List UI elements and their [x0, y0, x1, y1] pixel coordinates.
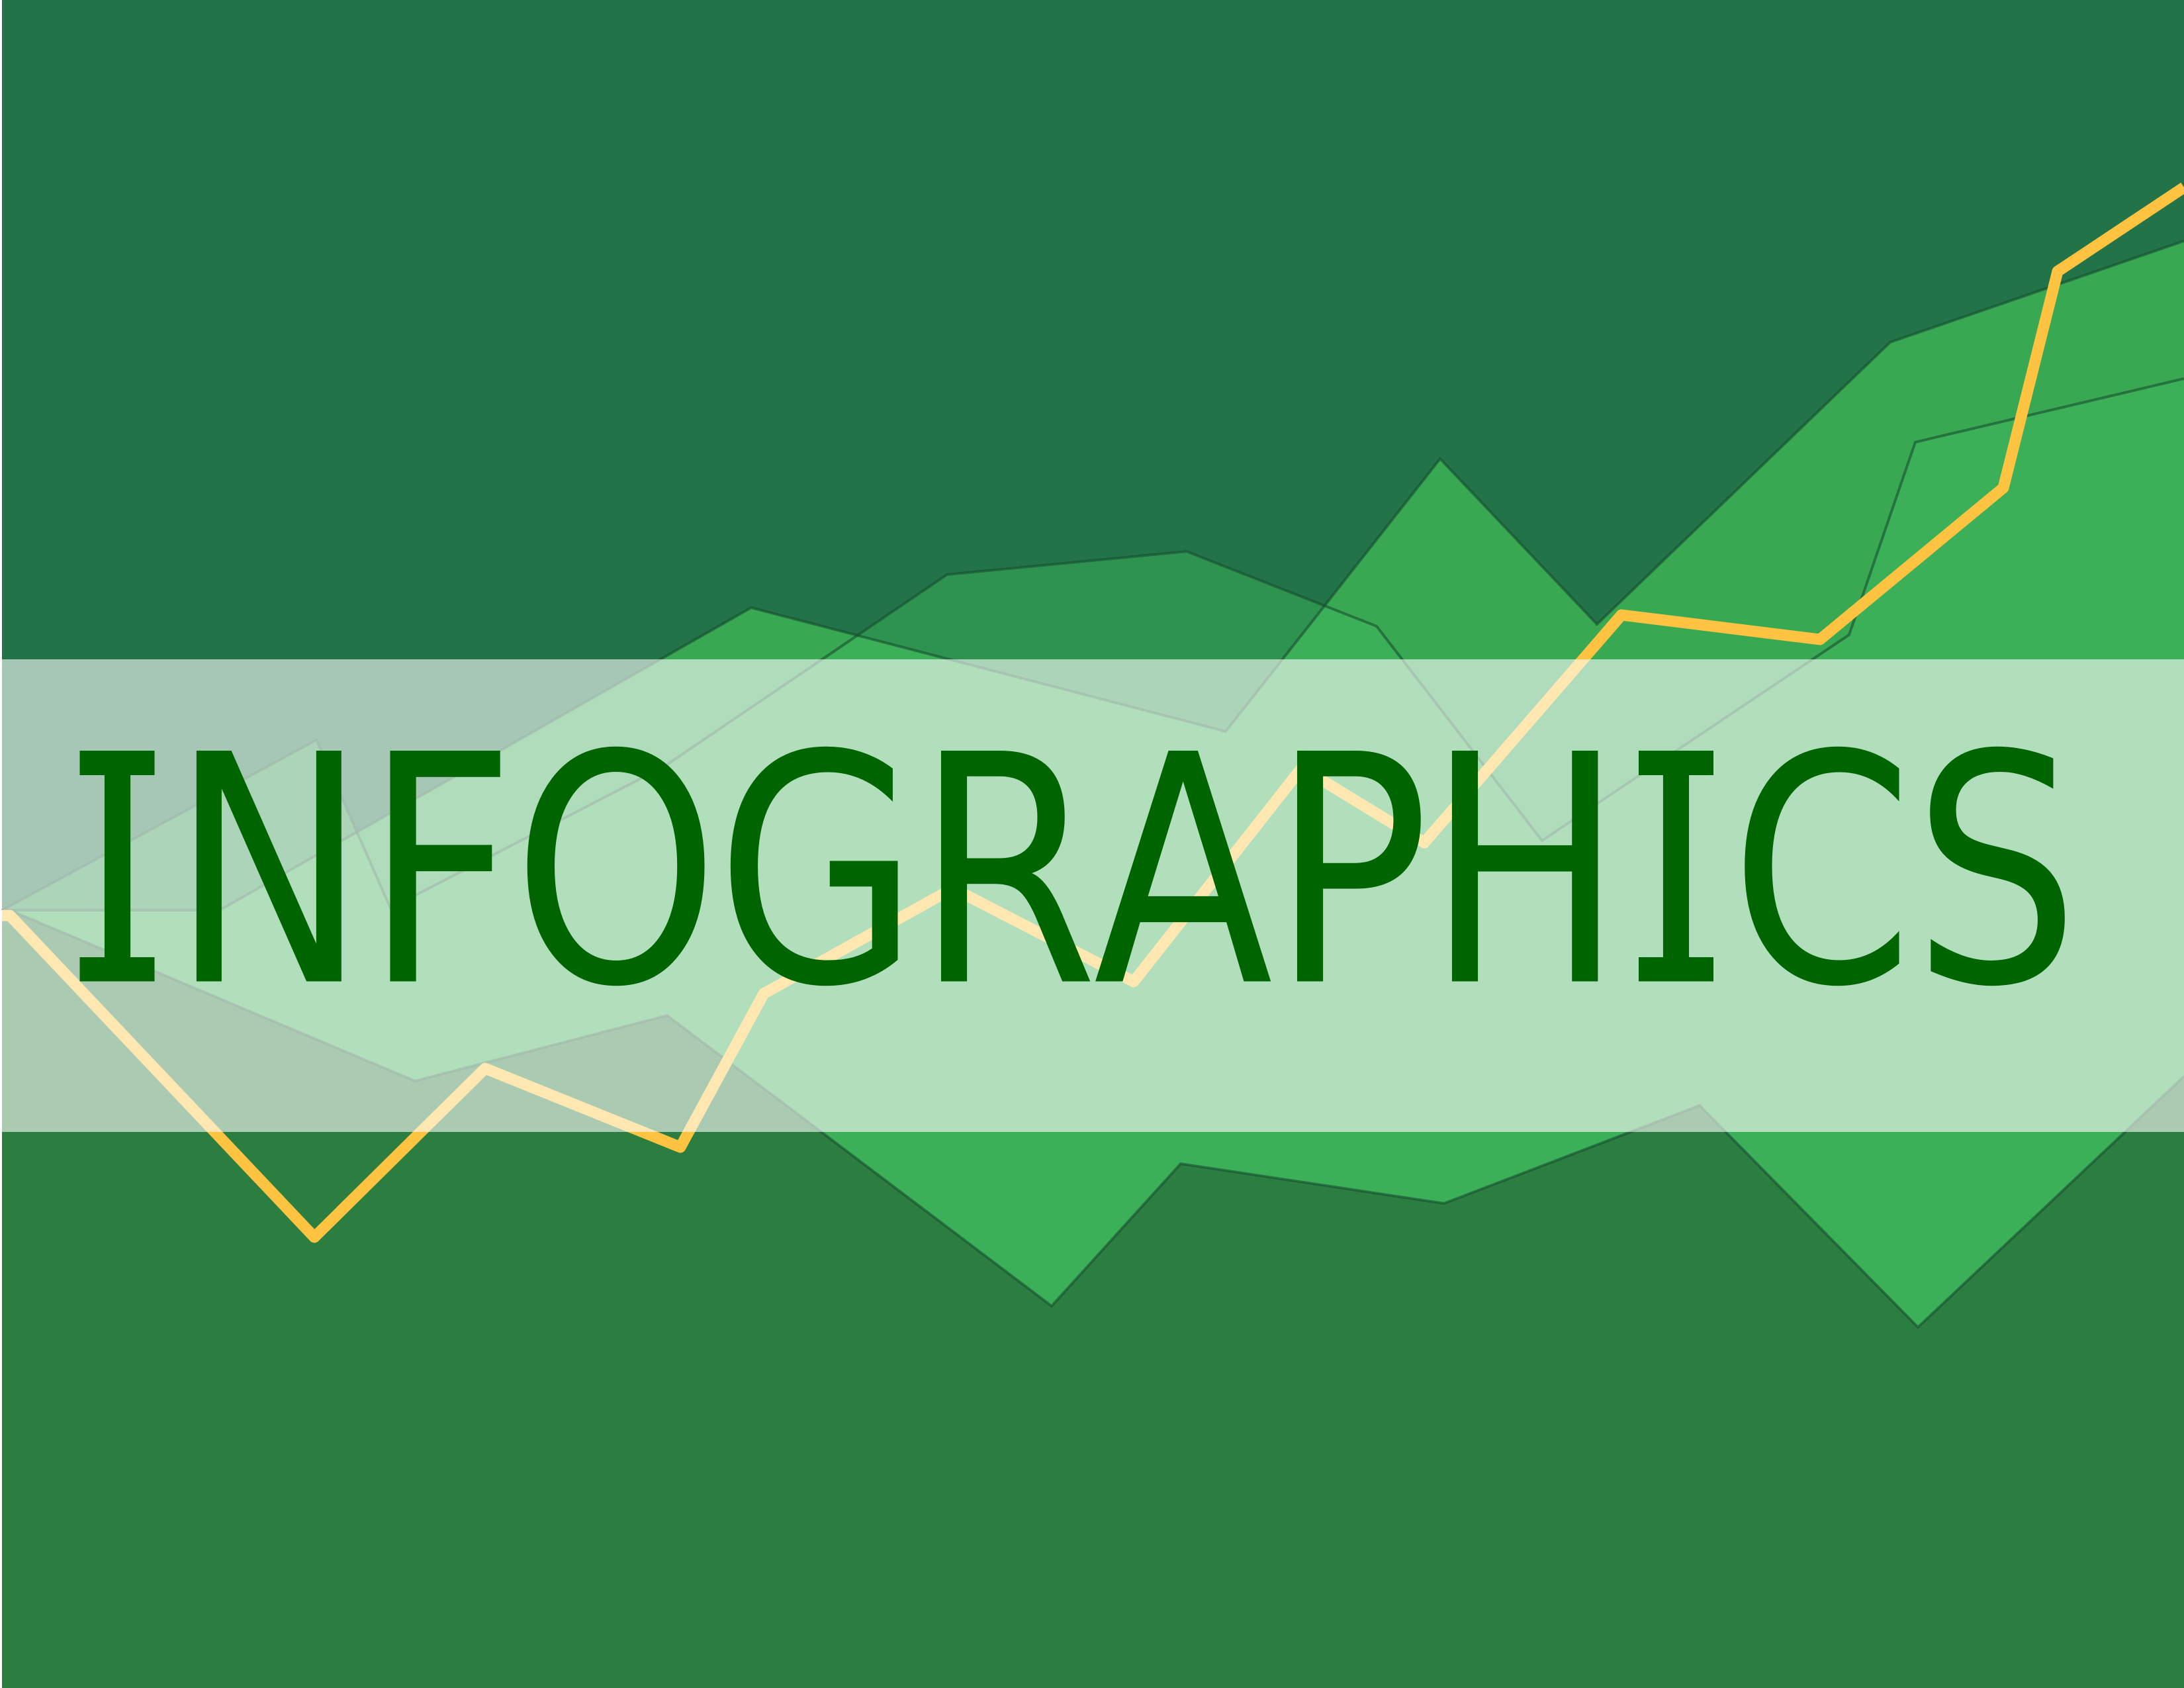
line: series C outline [2, 910, 2184, 1327]
upper series area A [2, 0, 2184, 910]
title band [2, 659, 2184, 1132]
overlap of upper areas [2, 0, 2184, 910]
line: series B outline [2, 379, 2184, 910]
line: highlighted yellow trend [2, 187, 2184, 1237]
line: series A outline [2, 241, 2184, 910]
upper series area B [2, 0, 2184, 910]
lower series area C [2, 910, 2184, 1688]
title: INFOGRAPHICS [79, 687, 2079, 1056]
